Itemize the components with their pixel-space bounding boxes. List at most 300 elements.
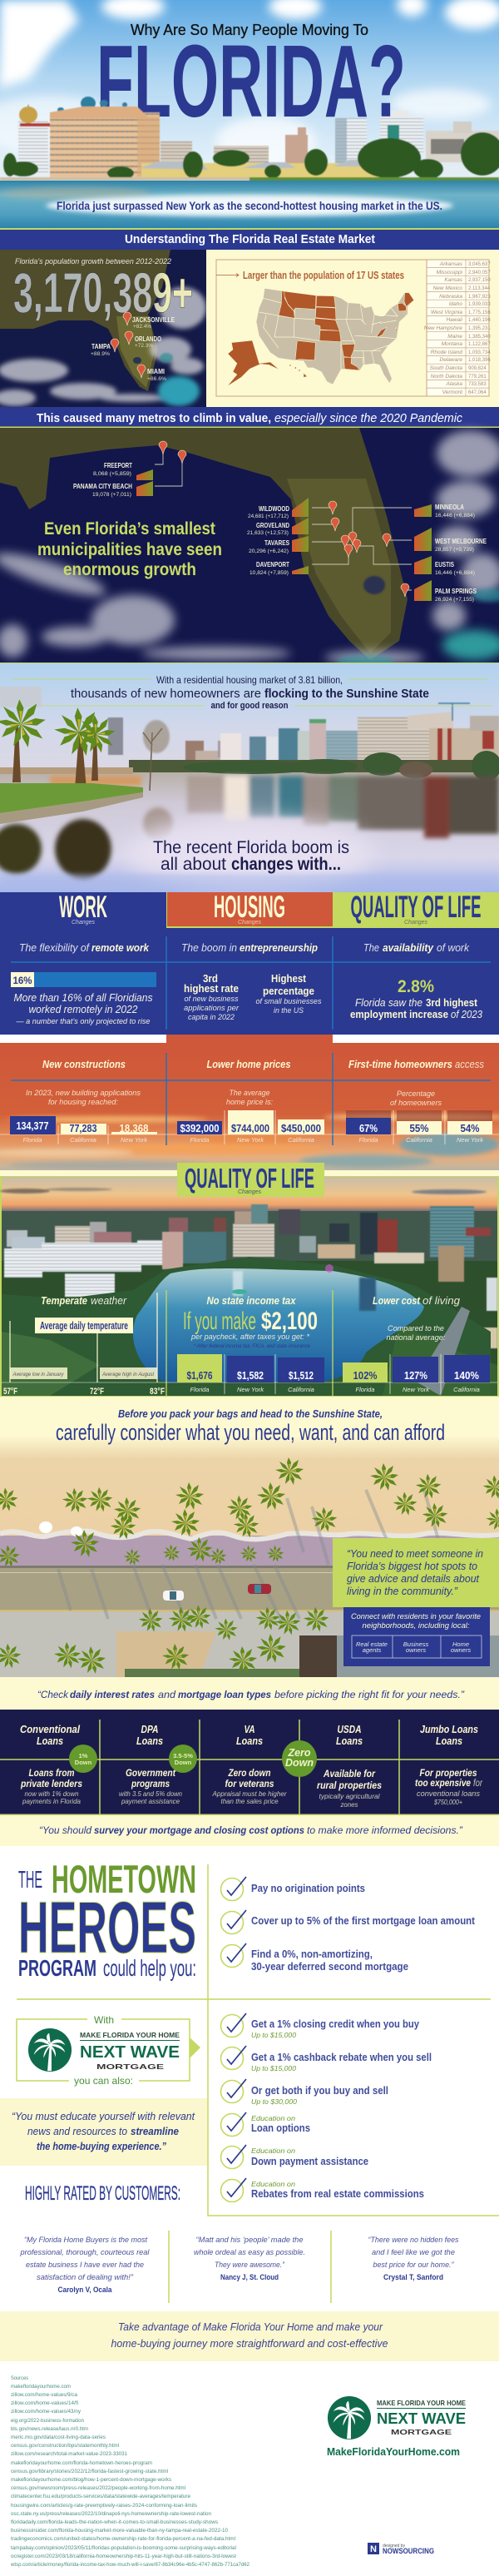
testimonial: Nancy J: They were awesome.” bbox=[215, 2261, 285, 2270]
column: new constructions: 18,368 bbox=[120, 1123, 149, 1134]
column: first-time homeowners: 55% bbox=[409, 1123, 429, 1134]
panel: closing call to action: Take advantage of Make Florida Your Home and make your bbox=[118, 2320, 383, 2333]
testimonial: Carolyn V: Carolyn V, Ocala bbox=[58, 2286, 112, 2295]
text block: sources: climatecenter.fsu.edu/products-services/data/statewide-averages/temperature bbox=[11, 2494, 191, 2499]
loan: conventional: Loans bbox=[37, 1735, 63, 1747]
panel: check rates quote: daily interest rates bbox=[70, 1690, 155, 1700]
panel: check rates quote bbox=[0, 1677, 499, 1710]
table: 17 state populations: Hawaii bbox=[446, 317, 463, 323]
loan: DPA: programs bbox=[131, 1779, 170, 1789]
heading: the hometown heroes program bbox=[18, 1857, 196, 1981]
text block: sources: zillow.com/home-values/9/ca bbox=[11, 2393, 78, 2398]
loan: USDA: Available for bbox=[323, 1769, 375, 1779]
testimonial: Nancy J: Nancy J, St. Cloud bbox=[220, 2273, 279, 2282]
text block: sources: wtsp.com/article/money/florida-income-tax-how-much-will-i-save/67-8b34c96e-4b5c-4747-862b-771ca7d62 bbox=[10, 2563, 250, 2568]
benefit: origination: Pay no origination points bbox=[251, 1883, 365, 1894]
badge: 1% down: 1% bbox=[79, 1752, 88, 1760]
stat: Minneola bbox=[414, 503, 475, 519]
column: entrepreneurship: of small businesses bbox=[256, 997, 322, 1006]
table: 17 state populations: Kansas bbox=[444, 277, 463, 283]
panel: survey options quote bbox=[0, 1815, 499, 1846]
column: no state income tax: $1,582 bbox=[237, 1370, 264, 1382]
column: lower cost of living: 140% bbox=[454, 1370, 479, 1382]
loan: VA: for veterans bbox=[225, 1779, 274, 1789]
pin: Miami: +86.6% bbox=[147, 376, 166, 382]
intro text: flocking to the Sunshine State bbox=[264, 687, 429, 701]
logo wordmark bbox=[80, 2031, 180, 2071]
pin: Jacksonville bbox=[123, 312, 175, 330]
stat: Wildwood: 24,681 (+17,712) bbox=[248, 514, 289, 519]
text block: sources: ocregister.com/2023/03/18/california-homeownership-hits-11-year-high-but-still-nations-3rd-lowest bbox=[11, 2554, 236, 2559]
loan: conventional: now with 1% down bbox=[25, 1789, 79, 1798]
column: no state income tax: If you make bbox=[183, 1308, 256, 1335]
quote box: Florida’s biggest hot spots to bbox=[347, 1560, 477, 1572]
column: remote work: worked remotely in 2022 bbox=[28, 1004, 138, 1015]
column: temperate weather: Temperate bbox=[41, 1295, 87, 1307]
table: 17 state populations: 1,967,923 bbox=[468, 295, 491, 300]
heading: the hometown heroes program: THE bbox=[18, 1867, 42, 1894]
stat: Wildwood: WILDWOOD bbox=[259, 504, 289, 513]
column: temperate weather: Average high in August bbox=[101, 1372, 155, 1377]
callout: connect with residents: Real estate bbox=[356, 1640, 388, 1648]
panel: closing call to action bbox=[0, 2311, 499, 2361]
callout: educate yourself quote: streamline bbox=[131, 2126, 179, 2137]
loan: jumbo: For properties bbox=[419, 1769, 477, 1779]
testimonial: Carolyn V: professional, thorough, courteous real bbox=[20, 2248, 150, 2257]
table: 17 state populations: 2,940,057 bbox=[468, 271, 491, 275]
column: no state income tax: No state income tax bbox=[206, 1295, 296, 1307]
benefit: closing credit bbox=[221, 2013, 419, 2039]
title: why are so many people moving to: Why Are So Many People Moving To bbox=[131, 22, 368, 38]
panel: check rates quote: and bbox=[158, 1690, 176, 1700]
column: entrepreneurship: applications per bbox=[184, 1004, 240, 1013]
logo: designed by NowSourcing: N bbox=[370, 2544, 377, 2554]
column: no state income tax: New York bbox=[237, 1386, 264, 1393]
text block: sources: floridadaily.com/florida-leads-the-nation-when-it-comes-to-small-businesses-study-shows bbox=[11, 2520, 218, 2525]
bright fade bbox=[125, 818, 374, 888]
loan: jumbo: conventional loans bbox=[417, 1789, 480, 1799]
benefit: down payment: Down payment assistance bbox=[251, 2156, 368, 2167]
table: 17 state populations: Mississippi bbox=[437, 270, 463, 275]
testimonial: Nancy J bbox=[194, 2236, 305, 2282]
stat: Eustis: 16,446 (+6,884) bbox=[435, 570, 475, 576]
heading: smallest municipalities bbox=[37, 519, 222, 579]
column: new constructions: 77,283 bbox=[70, 1123, 97, 1134]
column: temperate weather: 83°F bbox=[150, 1387, 165, 1397]
connector lines bbox=[155, 449, 412, 590]
badge: 1% down bbox=[69, 1745, 97, 1773]
benefit: cover 5% bbox=[221, 1910, 476, 1934]
table: 17 state populations: 1,093,734 bbox=[468, 350, 491, 355]
stat: Freeport: FREEPORT bbox=[104, 461, 133, 469]
intro text: With a residential housing market of 3.81 billion, bbox=[156, 674, 343, 686]
stat: West Melbourne bbox=[414, 528, 487, 553]
trees bbox=[3, 132, 499, 180]
low houses bbox=[141, 163, 383, 178]
callout: educate yourself quote: news and resources to bbox=[27, 2126, 127, 2137]
panel: survey options quote: to make more informed decisions.” bbox=[307, 1824, 463, 1836]
column: first-time homeowners: New York bbox=[457, 1136, 484, 1144]
lake reflections bbox=[50, 776, 499, 838]
column: lower cost of living: New York bbox=[403, 1386, 430, 1393]
column: new constructions bbox=[10, 1058, 157, 1144]
stat: Tavares bbox=[249, 536, 309, 554]
loan: conventional: Loans from bbox=[28, 1769, 75, 1779]
callout: connect with residents: Home bbox=[452, 1640, 469, 1648]
testimonials bbox=[20, 2231, 459, 2303]
text block: sources: osc.state.ny.us/press/releases/2022/10/dinapoli-nys-homeownership-rate-lowest-nation bbox=[11, 2512, 211, 2517]
stat: Tavares: TAVARES bbox=[264, 539, 289, 547]
testimonial: Crystal T: Crystal T, Sanford bbox=[383, 2273, 443, 2282]
stat: Tavares: 20,296 (+6,242) bbox=[249, 548, 289, 554]
loan: conventional: private lenders bbox=[20, 1779, 82, 1789]
benefit: rebates: Education on bbox=[251, 2180, 295, 2188]
heading bar: metros climb in value: especially since the 2020 Pandemic bbox=[274, 411, 462, 425]
column: availability of work: The bbox=[363, 941, 379, 954]
loan: conventional: payments in Florida bbox=[22, 1797, 81, 1805]
column: first-time homeowners: 54% bbox=[461, 1123, 479, 1134]
badge: 3.5-5% down: Down bbox=[175, 1759, 192, 1766]
heading: the hometown heroes program: HEROES bbox=[18, 1886, 196, 1968]
cars bbox=[163, 1584, 271, 1601]
column: availability of work: of work bbox=[437, 941, 470, 954]
text block: sources: makefloridayourhome.com/blog/how-1-percent-down-mortgage-works bbox=[11, 2478, 171, 2483]
logo wordmark: MAKE FLORIDA YOUR HOME bbox=[80, 2031, 180, 2039]
column: remote work: More than 16% of all Floridians bbox=[13, 992, 153, 1004]
column: lower cost of living: Lower cost bbox=[373, 1295, 421, 1307]
panel: check rates quote: mortgage loan types bbox=[178, 1690, 271, 1700]
table: 17 state populations: 1,775,156 bbox=[468, 310, 491, 315]
panel: work changes: Changes bbox=[72, 920, 95, 926]
column: no state income tax: $2,100 bbox=[261, 1308, 318, 1335]
text block: sources: makefloridayourhome.com/florida-hometown-heroes-program bbox=[11, 2461, 152, 2466]
logo: designed by NowSourcing: NOWSOURCING bbox=[383, 2547, 434, 2555]
promenade and road bbox=[0, 1521, 499, 1677]
callout: connect with residents: Business bbox=[403, 1640, 428, 1648]
column: first-time homeowners: California bbox=[406, 1136, 432, 1144]
table: 17 state populations: 1,018,396 bbox=[468, 358, 491, 363]
benefit: loan options bbox=[221, 2112, 310, 2136]
panel: work changes: HOUSING bbox=[214, 890, 285, 924]
table: 17 state populations: 2,937,150 bbox=[468, 278, 491, 283]
loan: DPA: with 3.5 and 5% down bbox=[119, 1789, 182, 1798]
column: new constructions: In 2023, new building applications bbox=[26, 1089, 141, 1098]
heading: smallest municipalities: municipalities have seen bbox=[37, 540, 222, 559]
testimonial: Carolyn V: “My Florida Home Buyers is the most bbox=[24, 2236, 147, 2245]
badge: 3.5-5% down bbox=[169, 1745, 197, 1773]
benefit: loan options: Education on bbox=[251, 2114, 295, 2122]
loan: jumbo: Loans bbox=[436, 1735, 462, 1747]
stat: Groveland: 21,633 (+12,573) bbox=[247, 530, 289, 536]
badge: 3.5-5% down: 3.5-5% bbox=[173, 1752, 193, 1760]
badge: zero down bbox=[282, 1740, 317, 1777]
benefit: rebates: Rebates from real estate commissions bbox=[251, 2188, 424, 2200]
panel: work changes bbox=[0, 890, 499, 1035]
loan: DPA: DPA bbox=[141, 1724, 158, 1735]
stat: Palm Springs bbox=[414, 580, 477, 603]
callout: connect with residents: neighborhoods, including local: bbox=[363, 1621, 470, 1630]
panel: hero header with sky, title and skyline bbox=[0, 0, 499, 229]
text block: sources: businessinsider.com/florida-housing-market-more-valuable-than-ny-tampa-real-estate-2022-10 bbox=[11, 2529, 229, 2534]
table: 17 state populations: 2,113,344 bbox=[468, 286, 491, 291]
pin: Miami: MIAMI bbox=[147, 367, 165, 375]
loan: DPA bbox=[119, 1724, 182, 1805]
table: 17 state populations: Vermont bbox=[442, 390, 463, 395]
benefit: second mortgage: 30-year deferred second mortgage bbox=[251, 1961, 408, 1973]
loan: jumbo: too expensive bbox=[415, 1779, 472, 1789]
badge: zero down: Zero bbox=[287, 1747, 311, 1759]
benefit: both: Up to $30,000 bbox=[251, 2097, 297, 2106]
loan: conventional bbox=[20, 1724, 82, 1805]
testimonial: Crystal T: best price for our home.” bbox=[373, 2261, 454, 2270]
city towers bbox=[4, 1204, 497, 1348]
logo: footer make Florida your home: MORTGAGE bbox=[391, 2429, 452, 2436]
heading: before you pack bbox=[56, 1408, 445, 1445]
table: 17 state populations: New Hampshire bbox=[424, 325, 462, 331]
table: 17 state populations: West Virginia bbox=[431, 310, 462, 315]
panel: survey options quote: survey your mortgage and closing cost options bbox=[94, 1824, 304, 1836]
heading: the hometown heroes program: HOMETOWN bbox=[52, 1857, 196, 1901]
table: 17 state populations: Idaho bbox=[449, 301, 462, 307]
trees around the lake bbox=[2, 1257, 491, 1396]
stat: Groveland bbox=[247, 518, 309, 536]
table: 17 state populations: Alaska bbox=[445, 381, 462, 387]
palm shadows bbox=[58, 1490, 441, 1623]
column: availability of work: Florida saw the bbox=[355, 997, 422, 1009]
column: no state income tax: Florida bbox=[190, 1386, 209, 1393]
pin: Tampa bbox=[91, 339, 119, 357]
arrow bbox=[190, 2037, 200, 2058]
heading: the hometown heroes program: PROGRAM bbox=[18, 1955, 96, 1981]
column: availability of work: availability bbox=[383, 941, 434, 954]
loan: VA: Appraisal must be higher bbox=[212, 1789, 288, 1798]
column: entrepreneurship bbox=[181, 941, 322, 1022]
stat: Freeport: 8,068 (+5,859) bbox=[93, 471, 131, 477]
map of US states bbox=[228, 288, 414, 386]
quote box: give advice and details about bbox=[347, 1572, 480, 1585]
dividers for benefits bbox=[17, 1864, 499, 2216]
intro text: thousands of new homeowners are bbox=[71, 687, 261, 701]
column: lower home prices: $744,000 bbox=[231, 1123, 269, 1134]
table: 17 state populations: 1,440,196 bbox=[468, 318, 491, 323]
heading bar: metros climb in value: This caused many metros to climb in value, bbox=[37, 411, 271, 425]
grass bank bbox=[0, 783, 143, 813]
benefit: both: Or get both if you buy and sell bbox=[251, 2085, 388, 2097]
benefit: down payment: Education on bbox=[251, 2147, 295, 2155]
heading: recent boom: The recent Florida boom is bbox=[153, 838, 349, 857]
stat: Eustis: EUSTIS bbox=[435, 560, 454, 568]
dome tower bbox=[18, 120, 48, 175]
panel: next wave mortgage logo box: you can also: bbox=[74, 2075, 133, 2087]
quote box: “You need to meet someone in bbox=[347, 1547, 483, 1560]
callout: educate yourself quote: the home-buying experience.” bbox=[37, 2141, 167, 2152]
column: lower cost of living: 102% bbox=[353, 1370, 378, 1382]
benefit: cashback: Get a 1% cashback rebate when you sell bbox=[251, 2052, 432, 2063]
benefit: both bbox=[221, 2079, 388, 2106]
column: new constructions: New constructions bbox=[42, 1058, 126, 1070]
table: 17 state populations: 1,385,340 bbox=[468, 335, 491, 340]
quote box: living in the community.” bbox=[347, 1585, 458, 1597]
loan: USDA: zones bbox=[340, 1800, 358, 1809]
loan: USDA: Loans bbox=[336, 1735, 363, 1747]
stat: Panama City Beach: PANAMA CITY BEACH bbox=[73, 482, 132, 490]
column: temperate weather bbox=[3, 1293, 165, 1397]
heading bar: understanding the Florida real estate market bbox=[0, 228, 499, 250]
benefit: closing credit: Up to $15,000 bbox=[251, 2031, 296, 2039]
column: first-time homeowners: of homeowners bbox=[390, 1099, 442, 1108]
loan: VA: Loans bbox=[236, 1735, 263, 1747]
testimonial: Carolyn V bbox=[20, 2236, 150, 2295]
testimonial: Crystal T: and I feel like we got the bbox=[372, 2248, 455, 2257]
table: 17 state populations: Montana bbox=[442, 341, 462, 347]
column: remote work: The flexibility of bbox=[19, 941, 90, 954]
testimonial: Carolyn V: satisfaction of dealing with!” bbox=[37, 2273, 134, 2282]
heading bar: metros climb in value bbox=[0, 407, 499, 428]
column: availability of work: employment increase bbox=[350, 1009, 448, 1020]
column: entrepreneurship: 3rd bbox=[203, 972, 218, 985]
table: 17 state populations: 909,824 bbox=[468, 366, 487, 371]
testimonial: Carolyn V: estate business I have ever had the bbox=[26, 2261, 144, 2270]
text block: sources: census.gov/newsroom/press-releases/2022/people-working-from-home.html bbox=[11, 2486, 185, 2491]
column: lower home prices: Florida bbox=[190, 1136, 209, 1144]
column: entrepreneurship: The boom in bbox=[181, 941, 237, 954]
loan: DPA: Loans bbox=[136, 1735, 163, 1747]
badge: 1% down: Down bbox=[75, 1759, 92, 1766]
benefit: origination bbox=[221, 1877, 365, 1901]
table: 17 state populations: Arkansas bbox=[439, 261, 463, 267]
column: first-time homeowners: access bbox=[455, 1058, 484, 1070]
loan: USDA: typically agricultural bbox=[319, 1792, 381, 1800]
tall peach condominium bbox=[50, 112, 160, 177]
text block: sources: bls.gov/news.release/laus.nr0.htm bbox=[11, 2427, 88, 2432]
loan: USDA: USDA bbox=[338, 1724, 361, 1735]
pin: Tampa: +88.9% bbox=[91, 351, 110, 357]
panel: Orlando lake photo with intro text bbox=[0, 663, 499, 893]
panel: work changes: WORK bbox=[59, 890, 107, 924]
text block: sources: makefloridayourhome.com bbox=[11, 2385, 71, 2390]
column: remote work: 16% bbox=[13, 975, 32, 986]
logo mark bbox=[28, 2028, 72, 2072]
stat: Davenport: DAVENPORT bbox=[256, 560, 290, 568]
column: availability of work: 3rd highest bbox=[426, 997, 478, 1009]
heading: the hometown heroes program: could help you: bbox=[103, 1955, 196, 1981]
column: entrepreneurship: percentage bbox=[263, 985, 314, 997]
logo: footer make Florida your home: NEXT WAVE bbox=[377, 2410, 466, 2427]
column: no state income tax: per paycheck, after taxes you get: * bbox=[190, 1333, 309, 1342]
pin: Orlando bbox=[125, 331, 161, 349]
panel: work changes: Changes bbox=[404, 920, 427, 926]
pin: Orlando: ORLANDO bbox=[135, 335, 161, 343]
text block: sources: zillow.com/research/total-market-value-2023-33031 bbox=[11, 2452, 128, 2457]
table: 17 state populations: 1,395,231 bbox=[468, 326, 491, 331]
stat: Eustis bbox=[414, 556, 475, 576]
heading: recent boom: all about bbox=[161, 855, 226, 874]
table: 17 state populations: New Mexico bbox=[433, 285, 462, 291]
stat: Groveland: GROVELAND bbox=[256, 521, 289, 529]
table: 17 state populations: Nebraska bbox=[439, 294, 462, 300]
column: no state income tax: California bbox=[288, 1386, 314, 1393]
column: temperate weather: 72°F bbox=[90, 1387, 104, 1397]
benefit: second mortgage: Find a 0%, non-amortizing, bbox=[251, 1948, 373, 1960]
column: first-time homeowners: 67% bbox=[359, 1123, 378, 1134]
text block: sources bbox=[10, 2376, 250, 2568]
column: new constructions: 134,377 bbox=[17, 1120, 49, 1132]
column: temperate weather: weather bbox=[91, 1295, 127, 1307]
column: temperate weather: 57°F bbox=[3, 1387, 17, 1397]
callout heading: Larger than the population of 17 US states bbox=[243, 270, 404, 281]
lake bbox=[133, 1268, 424, 1382]
loan: VA: Zero down bbox=[228, 1769, 271, 1779]
stat: Minneola: 16,446 (+6,884) bbox=[435, 513, 475, 519]
benefit: cashback bbox=[221, 2046, 432, 2072]
callout: educate yourself quote: “You must educate yourself with relevant bbox=[12, 2111, 195, 2122]
pin: Miami bbox=[137, 365, 166, 382]
panel: next wave mortgage logo box: With bbox=[94, 2014, 114, 2026]
column: remote work bbox=[11, 941, 156, 1026]
callout: connect with residents bbox=[343, 1607, 490, 1666]
pin: Tampa: TAMPA bbox=[91, 342, 111, 350]
palm trees bbox=[0, 1457, 499, 1674]
subtitle: Florida just surpassed New York as the second-hottest housing market in the US. bbox=[57, 199, 442, 212]
column: lower home prices: The average bbox=[230, 1089, 269, 1098]
callout: connect with residents: agents bbox=[363, 1646, 382, 1654]
text block: sources: Sources bbox=[11, 2376, 28, 2381]
column: lower home prices: California bbox=[288, 1136, 314, 1144]
loan: jumbo bbox=[415, 1724, 483, 1806]
panel: satellite map of small municipalities bbox=[0, 428, 499, 668]
column: new constructions: for housing reached: bbox=[48, 1098, 118, 1107]
skyline buildings bbox=[0, 687, 499, 770]
panel: loan types bbox=[0, 1710, 499, 1815]
column: first-time homeowners bbox=[346, 1058, 492, 1144]
callout: educate yourself quote bbox=[0, 2098, 207, 2166]
column: lower home prices: Lower home prices bbox=[206, 1058, 291, 1070]
loan: jumbo: Jumbo Loans bbox=[420, 1724, 478, 1735]
text block: sources: housingwire.com/articles/g-rate-preemptively-raises-2024-conforming-loan-limits bbox=[11, 2504, 197, 2509]
pin: Orlando: +72.3% bbox=[135, 343, 153, 349]
column: entrepreneurship: capita in 2022 bbox=[188, 1013, 235, 1022]
list: first benefits bbox=[221, 1877, 476, 1973]
intro text bbox=[11, 674, 492, 711]
column: temperate weather: Average daily temperature bbox=[40, 1320, 128, 1332]
table: 17 state populations: 647,064 bbox=[468, 390, 487, 395]
logo: footer make Florida your home: MakeFloridaYourHome.com bbox=[327, 2445, 460, 2458]
heading tab: quality of life: Changes bbox=[238, 1189, 261, 1195]
column: temperate weather: Average low in January bbox=[12, 1372, 64, 1377]
panel: survey options quote: “You should bbox=[39, 1824, 91, 1836]
logo: footer make Florida your home: MAKE FLORIDA YOUR HOME bbox=[377, 2399, 466, 2407]
column: availability of work: 2.8% bbox=[398, 977, 434, 996]
text block: sources: meric.mo.gov/data/cost-living-data-series bbox=[11, 2435, 106, 2440]
logo wordmark: NEXT WAVE bbox=[80, 2043, 180, 2062]
panel: quality of life with aerial city photo bbox=[0, 1163, 499, 1397]
stat: Davenport: 10,824 (+7,859) bbox=[250, 570, 289, 576]
heading: before you pack: Before you pack your bags and head to the Sunshine State, bbox=[118, 1408, 383, 1420]
testimonial: Nancy J: “Matt and his ‘people’ made the bbox=[196, 2236, 303, 2245]
table: 17 state populations: 779,261 bbox=[468, 375, 487, 380]
column: new constructions: New York bbox=[121, 1136, 148, 1144]
table: 17 state populations: Delaware bbox=[440, 357, 462, 363]
table: 17 state populations: Maine bbox=[447, 334, 462, 340]
column: availability of work: of 2023 bbox=[451, 1009, 482, 1020]
arrow bbox=[216, 273, 239, 276]
testimonial: Nancy J: whole ordeal as easy as possible. bbox=[194, 2248, 305, 2257]
intro text: and for good reason bbox=[211, 701, 289, 711]
column: first-time homeowners: Percentage bbox=[397, 1089, 435, 1099]
text block: sources: zillow.com/home-values/43/ny bbox=[11, 2410, 81, 2415]
column: no state income tax: * After federal income tax, FICA, and state insurance bbox=[194, 1344, 311, 1349]
loan: VA: VA bbox=[245, 1724, 254, 1735]
